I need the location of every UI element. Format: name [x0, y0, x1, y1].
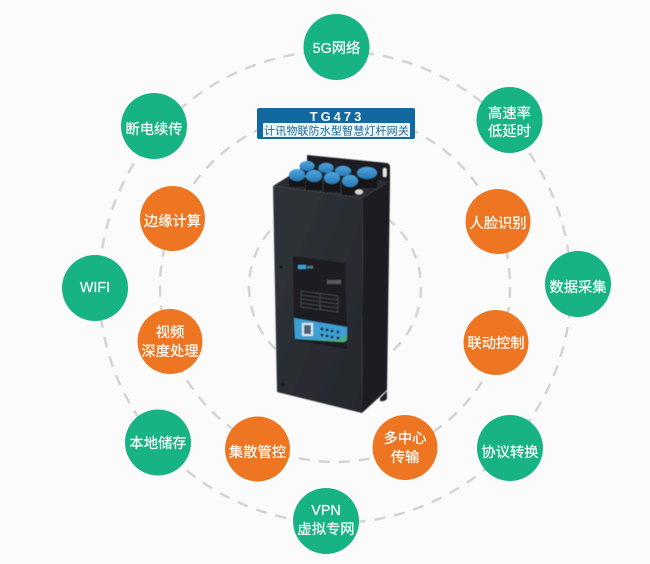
edge computing: 边缘计算	[144, 213, 201, 230]
protocol conversion: 协议转换	[481, 444, 539, 461]
edge computing	[140, 186, 205, 251]
distributed control	[225, 416, 290, 482]
multi-center transmission: 传输	[391, 449, 419, 466]
badge model name: TG473	[310, 109, 364, 124]
QR code	[302, 323, 313, 336]
5G network	[304, 14, 370, 80]
face recognition	[466, 189, 530, 254]
high speed low latency: 高速率	[488, 105, 531, 122]
rear mounting bracket	[307, 155, 390, 184]
orange feature circles	[138, 186, 530, 482]
badge subtitle: 计讯物联防水型智慧灯杆网关	[264, 124, 409, 138]
video depth processing: 视频	[156, 324, 184, 341]
VPN	[293, 488, 359, 554]
indicator dots	[320, 328, 340, 340]
spec table on plate	[301, 291, 338, 312]
linked control: 联动控制	[467, 335, 525, 352]
local storage	[125, 410, 191, 476]
high speed low latency	[476, 87, 542, 153]
logo on plate	[298, 265, 306, 269]
video depth processing	[138, 309, 202, 374]
device front face	[273, 186, 363, 413]
blue control strip	[294, 318, 347, 342]
local storage: 本地储存	[129, 435, 187, 452]
face recognition: 人脸识别	[469, 215, 527, 232]
device top face	[273, 176, 390, 198]
screws	[280, 266, 282, 268]
data collection: 数据采集	[549, 279, 607, 296]
VPN: VPN	[311, 503, 341, 519]
product: TG473 gateway device	[273, 155, 390, 413]
front label plate	[293, 256, 347, 349]
WIFI	[62, 255, 128, 321]
blue waterproof connectors	[289, 161, 377, 195]
multi-center transmission	[372, 415, 438, 480]
product title badge	[257, 108, 415, 139]
VPN: 虚拟专网	[297, 521, 355, 538]
bottom bracket foot	[380, 391, 387, 401]
5G network: 5G网络	[313, 40, 360, 57]
model text on plate	[327, 280, 341, 284]
power-off resume: 断电续传	[125, 121, 183, 138]
protocol conversion	[477, 415, 543, 481]
power-off resume	[121, 93, 187, 159]
high speed low latency: 低延时	[488, 123, 531, 140]
video depth processing: 深度处理	[141, 343, 199, 360]
WIFI: WIFI	[80, 280, 110, 296]
dashed rings	[99, 51, 571, 523]
multi-center transmission: 多中心	[384, 430, 426, 447]
device side face	[362, 181, 390, 413]
linked control	[464, 310, 528, 375]
distributed control: 集散管控	[229, 444, 286, 461]
data collection	[545, 251, 611, 317]
